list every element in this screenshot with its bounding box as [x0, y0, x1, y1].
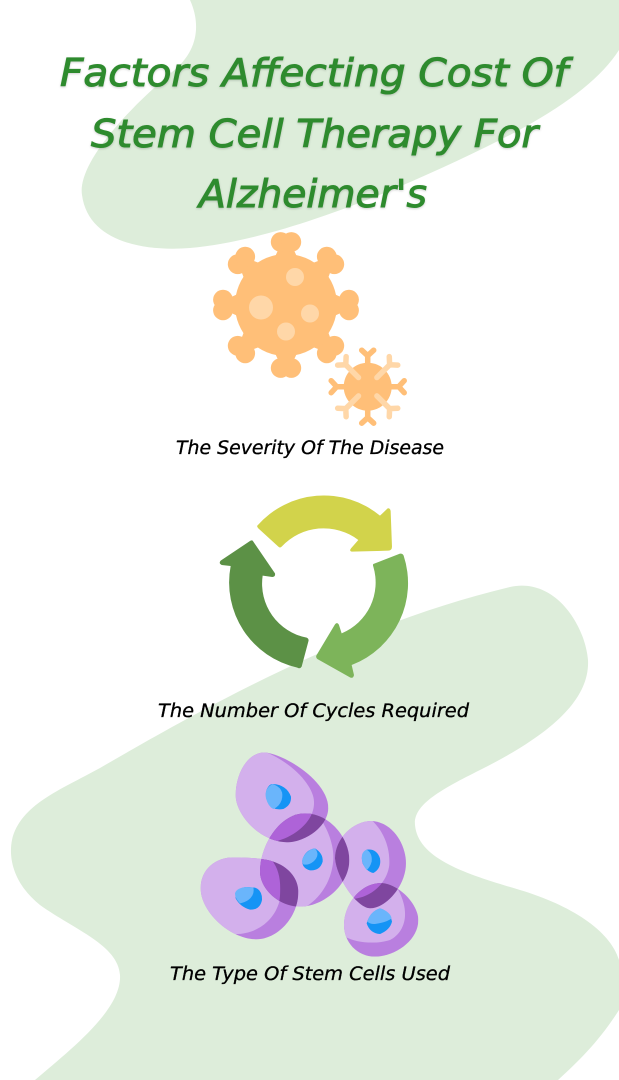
overlap top and centre — [269, 813, 326, 842]
label: severity: The Severity Of The Disease — [176, 438, 444, 459]
icon: cycle arrows — [220, 495, 408, 678]
cell right — [335, 821, 406, 898]
title — [60, 51, 574, 216]
title: Alzheimer's — [196, 172, 427, 216]
light green arrow — [316, 554, 408, 678]
cell bottom right — [344, 883, 418, 956]
overlap right and centre — [335, 837, 350, 882]
overlap right and bottom — [354, 883, 398, 908]
small virus particle — [331, 350, 404, 423]
background blob: top — [82, 0, 619, 249]
nucleus bottom right — [367, 908, 392, 934]
label: cycles: The Number Of Cycles Required — [158, 701, 469, 722]
large virus particle — [213, 232, 359, 378]
nucleus right — [362, 849, 380, 873]
nucleus centre — [302, 848, 323, 870]
title: Factors Affecting Cost Of — [60, 51, 574, 95]
dark green arrow — [220, 540, 309, 668]
yellow arrow — [257, 495, 392, 552]
cell top — [236, 752, 328, 838]
nucleus left — [235, 887, 262, 910]
overlap left and centre — [260, 859, 298, 906]
nucleus top — [266, 784, 291, 809]
background blob: bottom — [11, 586, 619, 1080]
label: stem cell type: The Type Of Stem Cells Used — [170, 964, 450, 985]
cell left — [200, 857, 298, 940]
icon: stem cells — [200, 752, 418, 956]
title: Stem Cell Therapy For — [91, 112, 541, 156]
icon: virus — [213, 232, 404, 423]
cell centre — [261, 814, 342, 907]
